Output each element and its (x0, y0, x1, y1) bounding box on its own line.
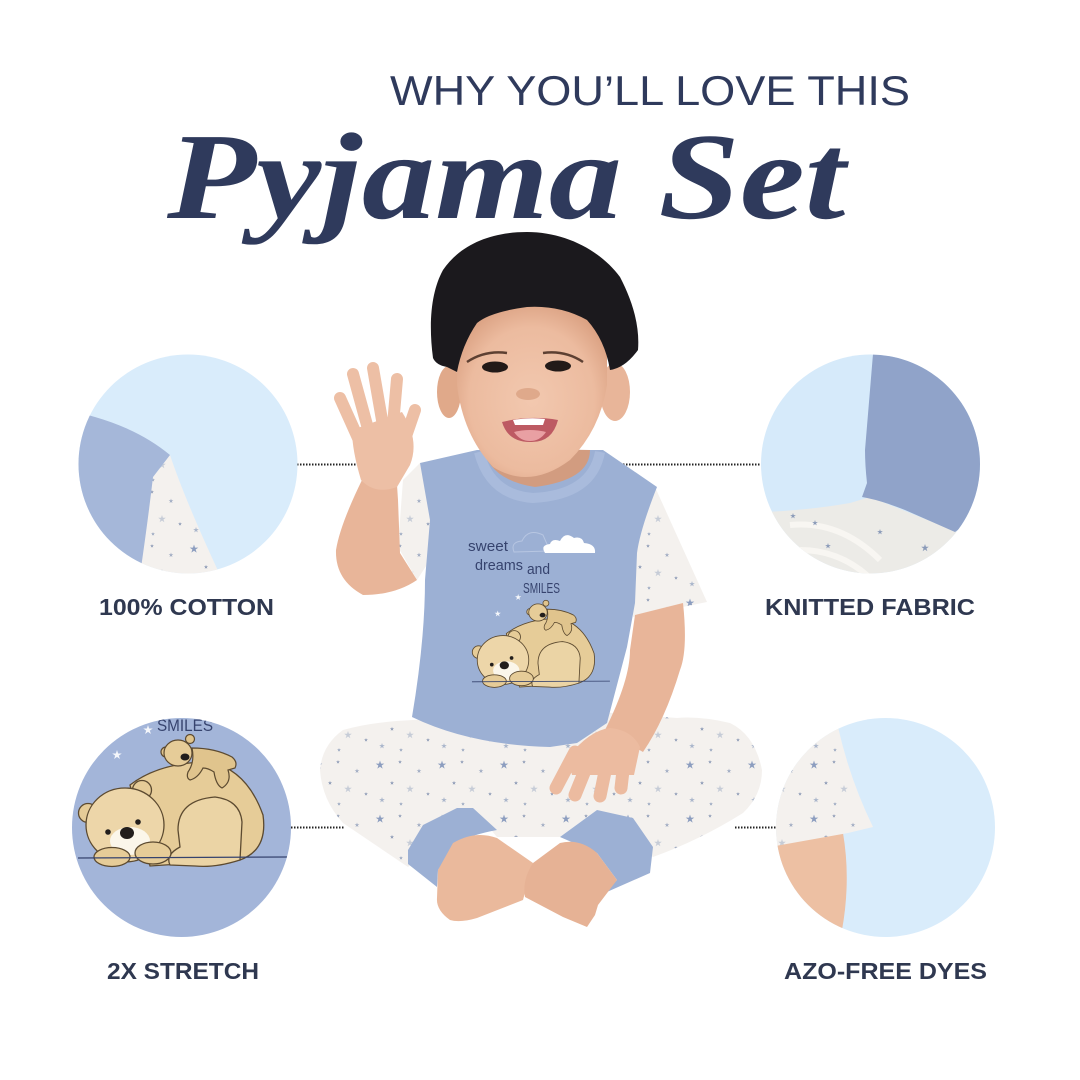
raised hand palm (352, 412, 414, 490)
face (457, 305, 607, 477)
nose (516, 388, 540, 400)
foot right (524, 842, 617, 927)
right sleeve (632, 487, 707, 617)
label: 100% cotton: 100% COTTON (99, 594, 274, 620)
circle: azo-free dyes detail (770, 716, 998, 940)
shirt print: smiles: SMILES (523, 580, 560, 597)
shirt print: and: and (527, 561, 550, 578)
ears (437, 366, 461, 418)
connector: azo-free dyes (735, 826, 776, 828)
raised arm (336, 480, 417, 595)
foot left (437, 835, 533, 921)
pants (320, 712, 762, 867)
shirt print: dreams: dreams (475, 557, 523, 574)
eyebrows (467, 352, 583, 362)
circle: stretch detail: SMILES (157, 716, 213, 735)
cloud (513, 533, 550, 552)
label: 2x stretch: 2X STRETCH (107, 958, 259, 984)
connector: stretch (291, 826, 345, 828)
mouth (502, 418, 558, 442)
shirt print: sweet: sweet (468, 538, 509, 555)
cuff left (408, 808, 497, 887)
t-shirt (412, 450, 657, 747)
circle: knitted fabric detail (760, 354, 985, 578)
collar (479, 452, 600, 498)
neck (483, 448, 590, 487)
resting hand (556, 728, 640, 796)
right arm (605, 603, 685, 752)
label: knitted fabric: KNITTED FABRIC (765, 594, 975, 620)
eyes (482, 362, 508, 372)
bear print (472, 594, 610, 687)
left sleeve (398, 463, 432, 580)
label: azo-free dyes: AZO-FREE DYES (784, 958, 987, 984)
cuff right (560, 810, 653, 895)
illustration: seated baby (320, 232, 762, 927)
circle: cotton detail (70, 354, 298, 580)
raised hand fingers (340, 368, 415, 445)
title: pyjama set: Pyjama Set (166, 109, 849, 245)
circle: stretch detail (70, 716, 294, 940)
hair (431, 232, 638, 372)
connector: knitted fabric (620, 464, 761, 466)
connector: cotton (297, 464, 362, 466)
title: why you'll love this: WHY YOU’LL LOVE THIS (390, 67, 910, 114)
